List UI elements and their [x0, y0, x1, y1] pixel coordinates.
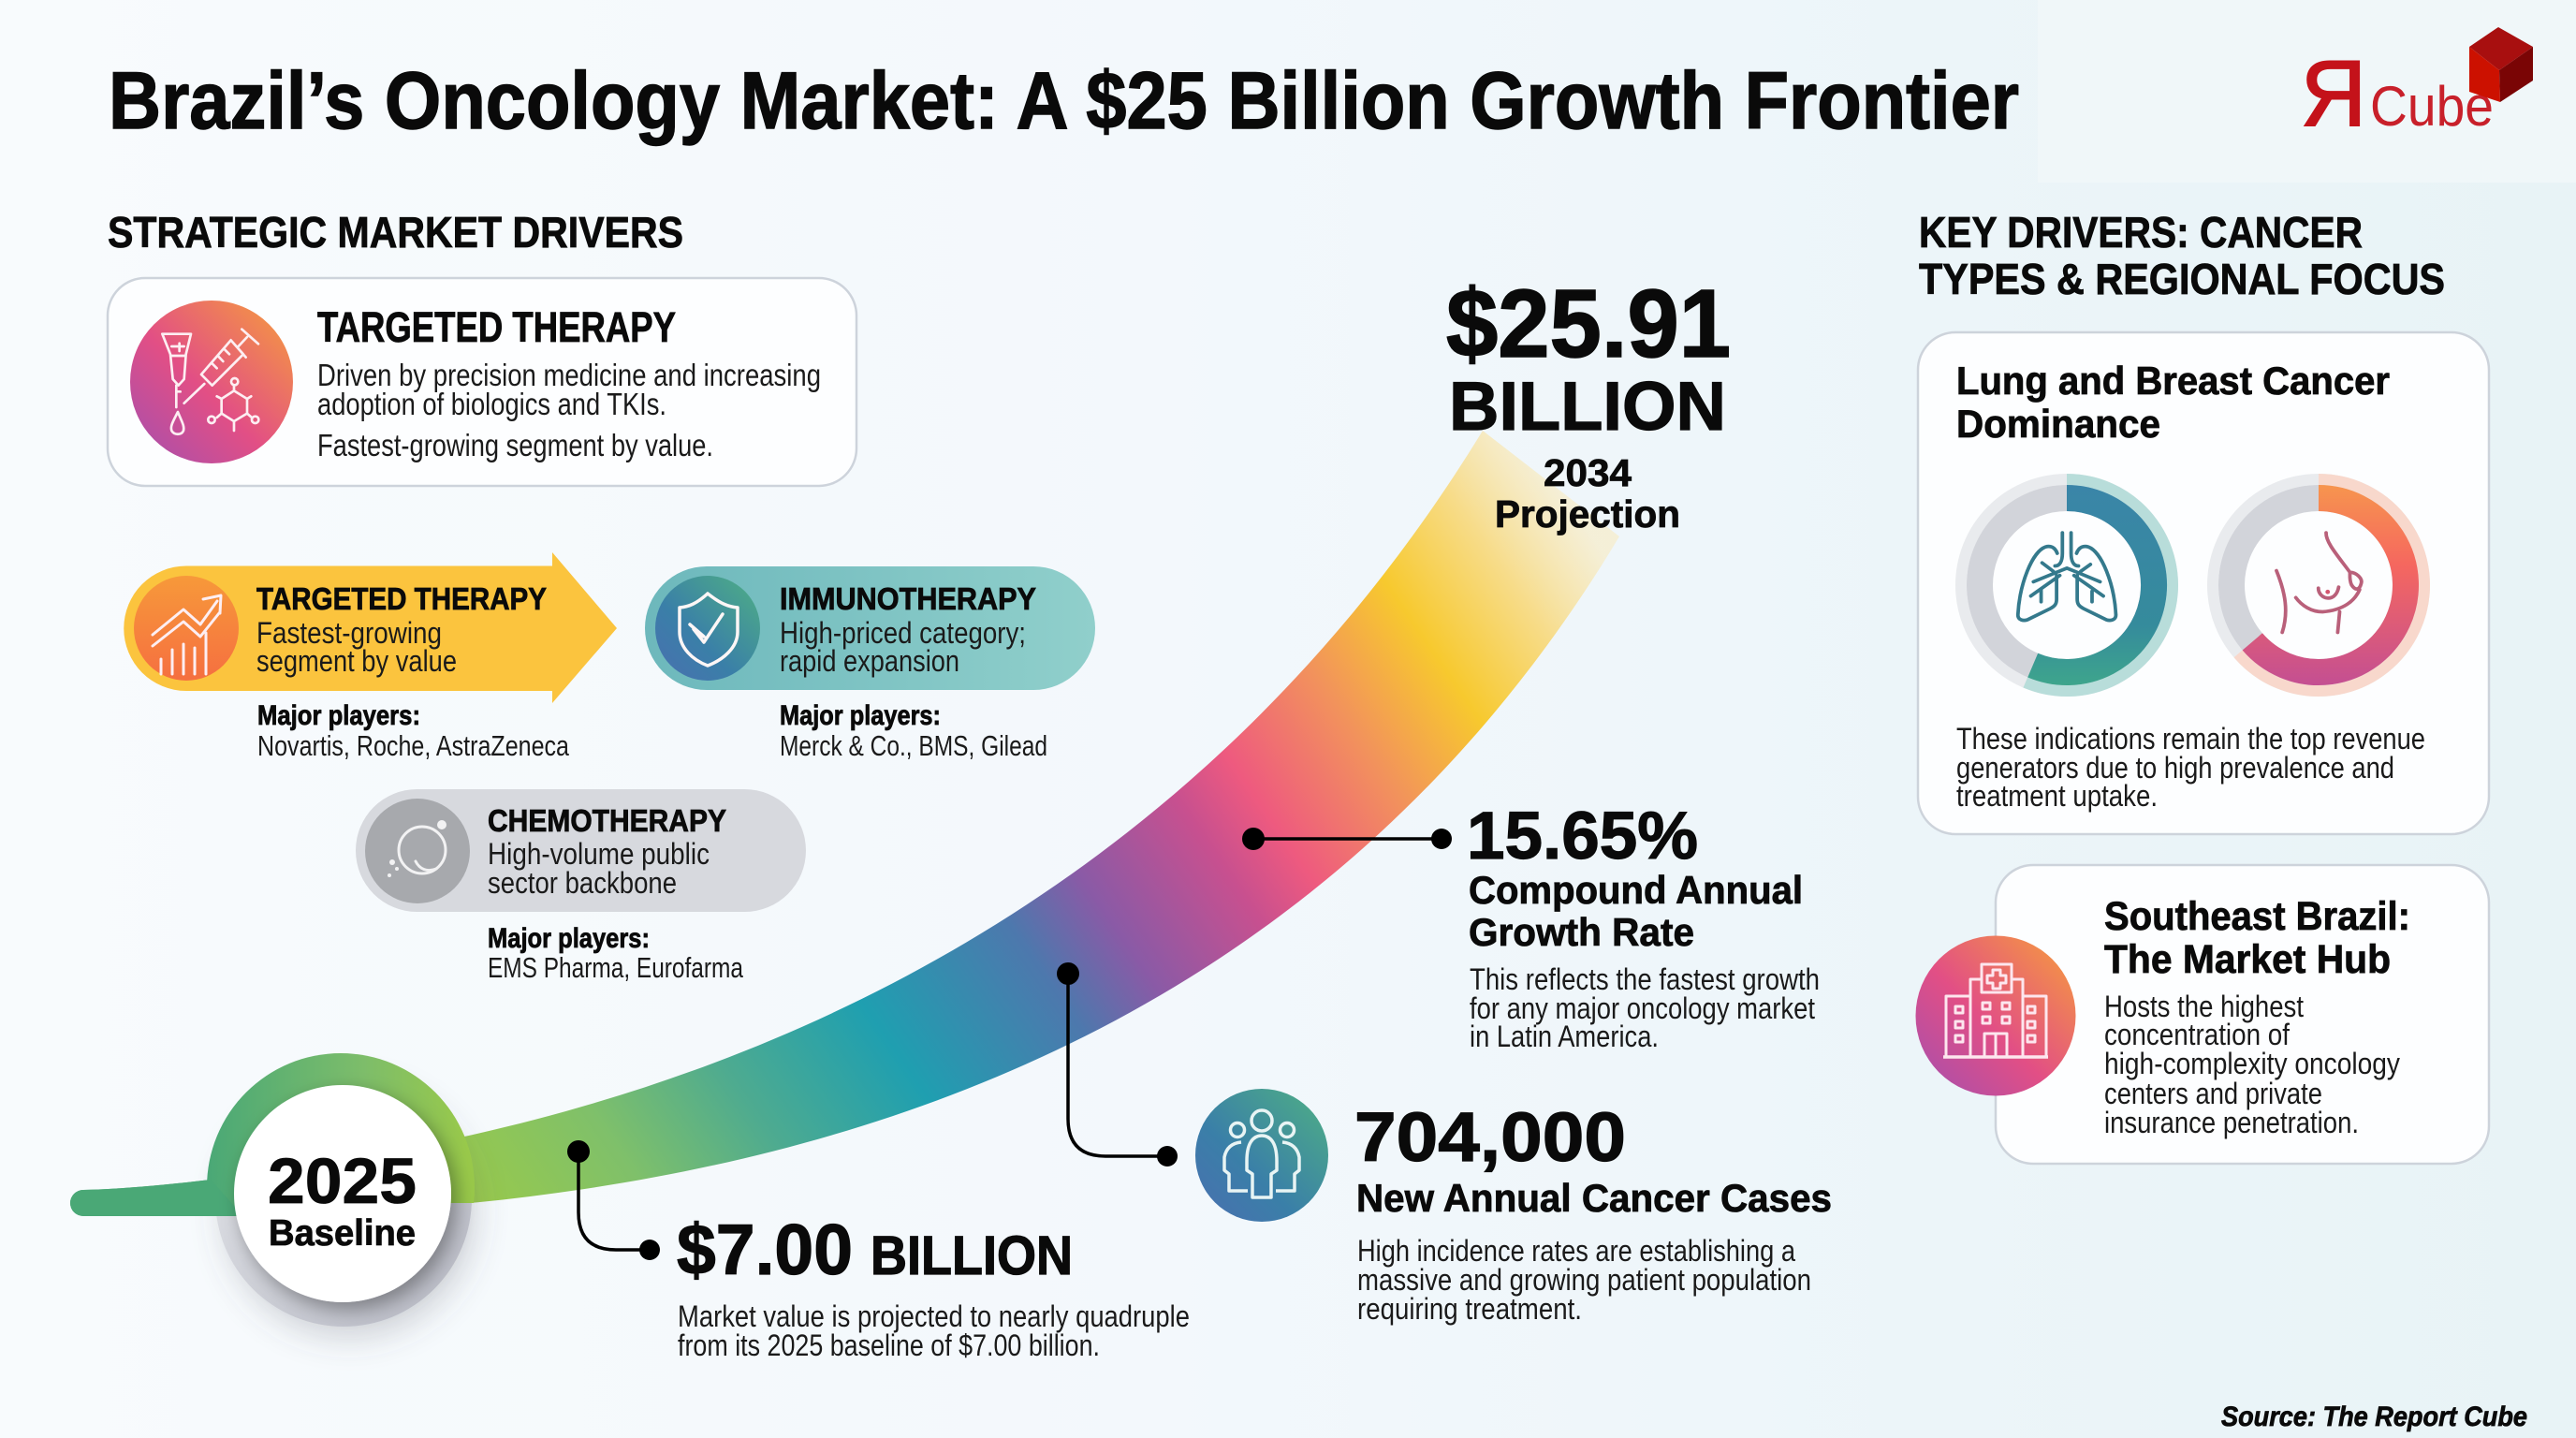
panel: targeted therapy arrow — [124, 552, 617, 703]
panel body text: These indications remain the top revenue — [1956, 722, 2425, 756]
logo: RCube: Cube — [2370, 75, 2494, 138]
callout: new annual cancer cases: requiring treatment. — [1357, 1292, 1582, 1326]
callout: CAGR: Compound Annual — [1469, 868, 1803, 912]
callout: new annual cancer cases: 704,000 — [1354, 1098, 1626, 1176]
baseline label — [268, 1145, 417, 1254]
panel: chemotherapy pill — [356, 789, 806, 912]
major players: targeted therapy — [257, 700, 570, 762]
card body text: Driven by precision medicine and increasing — [317, 358, 821, 392]
major players: chemotherapy — [488, 923, 744, 984]
pill text: Fastest-growing — [256, 616, 442, 650]
panel body text: concentration of — [2104, 1018, 2290, 1051]
callout: CAGR: for any major oncology market — [1470, 991, 1815, 1025]
connector: baseline value — [567, 1140, 660, 1260]
callout: new annual cancer cases: High incidence rates are establishing a — [1357, 1234, 1795, 1268]
icon: syringe and molecule — [130, 301, 293, 463]
panel: southeast brazil — [1915, 865, 2489, 1164]
heading: key drivers: KEY DRIVERS: CANCER — [1919, 208, 2363, 257]
pill text: TARGETED THERAPY — [256, 581, 547, 616]
panel body text: insurance penetration. — [2104, 1106, 2359, 1139]
panel body text: generators due to high prevalence and — [1956, 751, 2394, 785]
logo: RCube: Я — [2301, 41, 2366, 145]
major players: targeted therapy: Major players: — [257, 700, 420, 731]
callout: 7 billion baseline: from its 2025 baseline of $7.00 billion. — [678, 1328, 1100, 1362]
pill text — [488, 803, 726, 900]
connector: CAGR — [1242, 828, 1452, 850]
panel: immunotherapy pill — [645, 566, 1095, 690]
callout: new annual cancer cases — [1354, 1098, 1832, 1326]
major players: targeted therapy: Novartis, Roche, AstraZeneca — [257, 729, 570, 762]
panel body text: centers and private — [2104, 1077, 2322, 1110]
callout: new annual cancer cases: massive and growing patient population — [1357, 1263, 1811, 1297]
icon: shield — [655, 576, 760, 681]
panel body text — [1956, 722, 2425, 813]
panel heading: Dominance — [1956, 402, 2160, 446]
callout: CAGR: in Latin America. — [1470, 1020, 1659, 1053]
pill text: IMMUNOTHERAPY — [780, 581, 1036, 616]
heading: key drivers: TYPES & REGIONAL FOCUS — [1919, 255, 2445, 303]
callout: CAGR: Growth Rate — [1469, 910, 1694, 954]
callout: new annual cancer cases: New Annual Cancer Cases — [1356, 1176, 1832, 1220]
callout: 2034 projection: 2034 — [1544, 451, 1632, 494]
card heading: TARGETED THERAPY — [317, 303, 676, 351]
major players: chemotherapy: EMS Pharma, Eurofarma — [488, 951, 744, 984]
panel heading: Southeast Brazil: — [2104, 894, 2410, 939]
panel body text: Hosts the highest — [2104, 990, 2304, 1023]
callout: 7 billion baseline: Market value is projected to nearly quadruple — [678, 1299, 1190, 1333]
chart: growth ribbon — [70, 431, 1619, 1216]
pill text — [256, 581, 547, 678]
card body text: Fastest-growing segment by value. — [317, 428, 713, 462]
baseline label: Baseline — [269, 1213, 416, 1254]
major players: immunotherapy: Major players: — [780, 700, 941, 731]
panel body text: treatment uptake. — [1956, 779, 2158, 813]
panel heading — [1956, 359, 2390, 446]
panel heading: The Market Hub — [2104, 937, 2391, 982]
connector: cancer cases — [1057, 962, 1178, 1167]
icon: growth chart — [134, 576, 239, 681]
panel: lung and breast cancer — [1918, 332, 2489, 834]
pill text: CHEMOTHERAPY — [488, 803, 726, 838]
pill text: segment by value — [256, 644, 457, 678]
panel heading — [2104, 894, 2410, 982]
donut: breast cancer — [2213, 479, 2424, 691]
donut: lung cancer — [1961, 479, 2173, 691]
pill text: High-volume public — [488, 837, 710, 871]
card body text: adoption of biologics and TKIs. — [317, 387, 666, 421]
panel heading: Lung and Breast Cancer — [1956, 359, 2390, 403]
logo: RCube — [2301, 27, 2533, 145]
callout: CAGR — [1467, 800, 1820, 1053]
panel: targeted therapy card — [108, 278, 856, 486]
callout: 7 billion baseline: BILLION — [871, 1225, 1073, 1286]
callout: CAGR: 15.65% — [1467, 800, 1698, 873]
pill text — [780, 581, 1036, 678]
callout: 2034 projection: Projection — [1495, 492, 1680, 536]
heading: key drivers — [1919, 208, 2445, 303]
callout: 2034 projection: $25.91 — [1446, 270, 1731, 377]
source note: Source: The Report Cube — [2221, 1401, 2527, 1432]
callout: 2034 projection: BILLION — [1449, 369, 1726, 445]
card body text — [317, 358, 821, 462]
pill text: sector backbone — [488, 866, 677, 900]
callout: 7 billion baseline — [677, 1211, 1190, 1362]
callout: 7 billion baseline: $7.00 — [677, 1211, 853, 1290]
major players: immunotherapy — [780, 700, 1047, 762]
pill text: High-priced category; — [780, 616, 1026, 650]
callout: CAGR: This reflects the fastest growth — [1470, 962, 1820, 996]
icon: chemo cell — [365, 799, 470, 903]
baseline label: 2025 — [268, 1145, 417, 1217]
icon: people — [1195, 1089, 1328, 1222]
major players: chemotherapy: Major players: — [488, 923, 650, 954]
baseline marker — [70, 1053, 475, 1327]
major players: immunotherapy: Merck & Co., BMS, Gilead — [780, 729, 1047, 762]
heading: strategic market drivers: STRATEGIC MARKET DRIVERS — [108, 208, 683, 257]
title: Brazil’s Oncology Market: A $25 Billion Growth Frontier — [109, 56, 2019, 146]
panel body text: high-complexity oncology — [2104, 1047, 2400, 1080]
callout: 2034 projection — [1446, 270, 1731, 536]
panel body text — [2104, 990, 2400, 1139]
pill text: rapid expansion — [780, 644, 959, 678]
icon: hospital — [1915, 936, 2076, 1095]
